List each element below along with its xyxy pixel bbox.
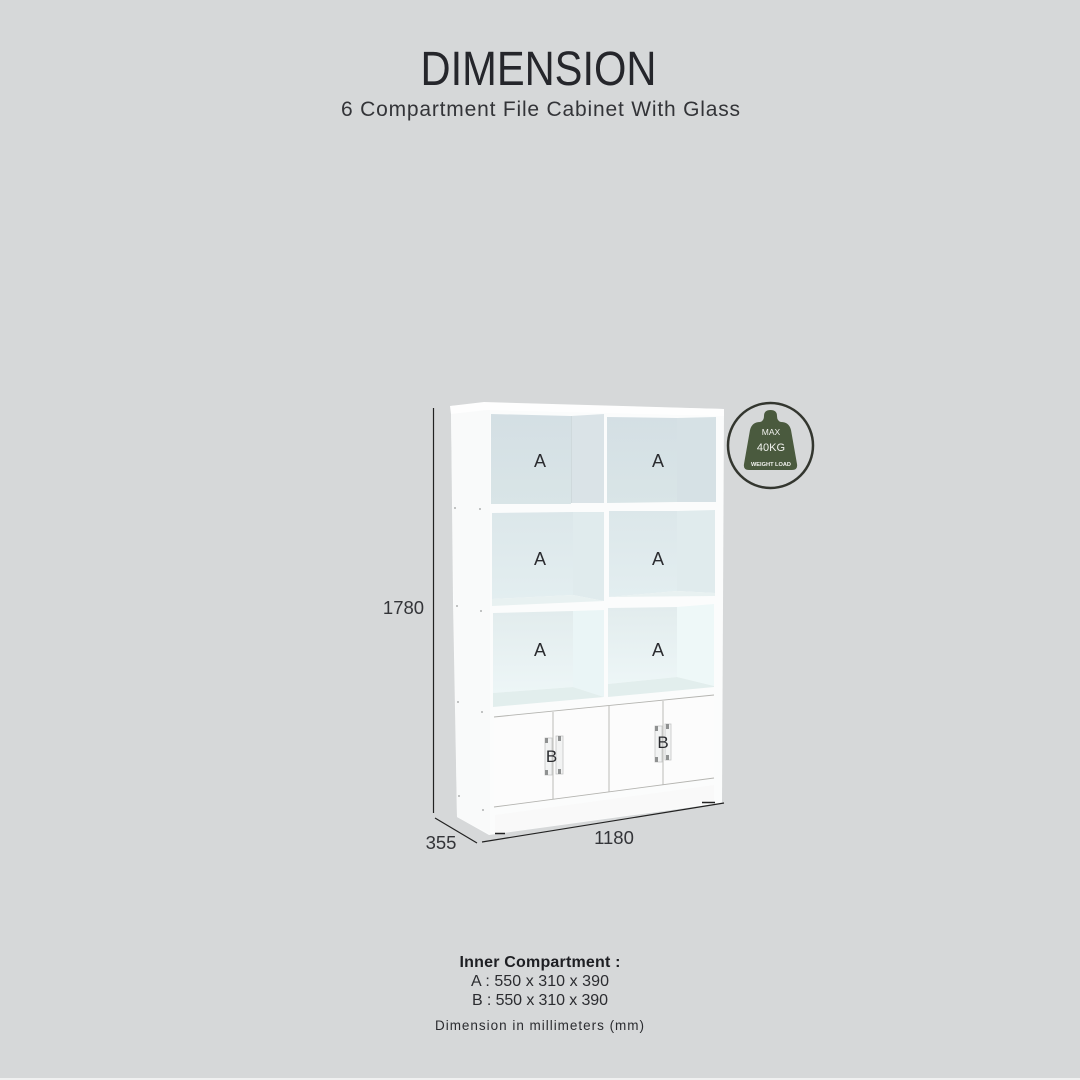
feet [495,802,715,834]
weight badge [728,403,813,488]
compartment row 2 left [492,512,604,606]
depth label: 355 [426,832,456,853]
door seams [494,695,714,807]
height label: 1780 [383,597,424,618]
title: DIMENSION [420,43,656,96]
badge text: MAX [762,427,781,437]
doors [494,695,714,807]
depth dimension line [435,818,477,843]
compartment labels: A [534,640,546,660]
compartment labels: A [652,640,664,660]
compartment labels: B [546,747,557,766]
subtitle: 6 Compartment File Cabinet With Glass [341,98,740,121]
width label: 1180 [594,827,634,848]
bottom edge line [0,1078,1080,1080]
handles right [655,724,671,762]
compartment labels: B [657,733,669,752]
units note: Dimension in millimeters (mm) [435,1018,644,1033]
cabinet body [451,403,724,835]
inner compartment text: B : 550 x 310 x 390 [472,992,608,1009]
height dimension line [432,408,434,813]
compartment labels: A [652,451,664,471]
compartment labels: A [534,451,546,471]
compartment row 2 right [609,510,715,597]
side panel screws [454,507,484,811]
badge text: 40KG [757,442,785,454]
cabinet [450,402,724,835]
compartment labels [534,451,669,766]
inner compartment text: A : 550 x 310 x 390 [471,973,609,990]
badge ring [728,403,813,488]
compartment labels: A [652,549,664,569]
plinth [495,785,714,834]
cabinet side panel [451,410,490,834]
badge text: WEIGHT LOAD [751,462,791,468]
compartment row 1 left [491,414,604,504]
compartment labels: A [534,549,546,569]
compartment row 1 right [607,417,716,503]
badge text [751,427,791,468]
cabinet top face [450,402,724,416]
handles left [545,736,563,775]
inner compartment text [460,954,620,1009]
compartment row 3 left [493,610,604,707]
icon: weight [744,410,797,470]
compartment row 3 right [608,604,714,697]
width dimension line [482,803,724,842]
inner compartment text: Inner Compartment : [460,954,620,971]
